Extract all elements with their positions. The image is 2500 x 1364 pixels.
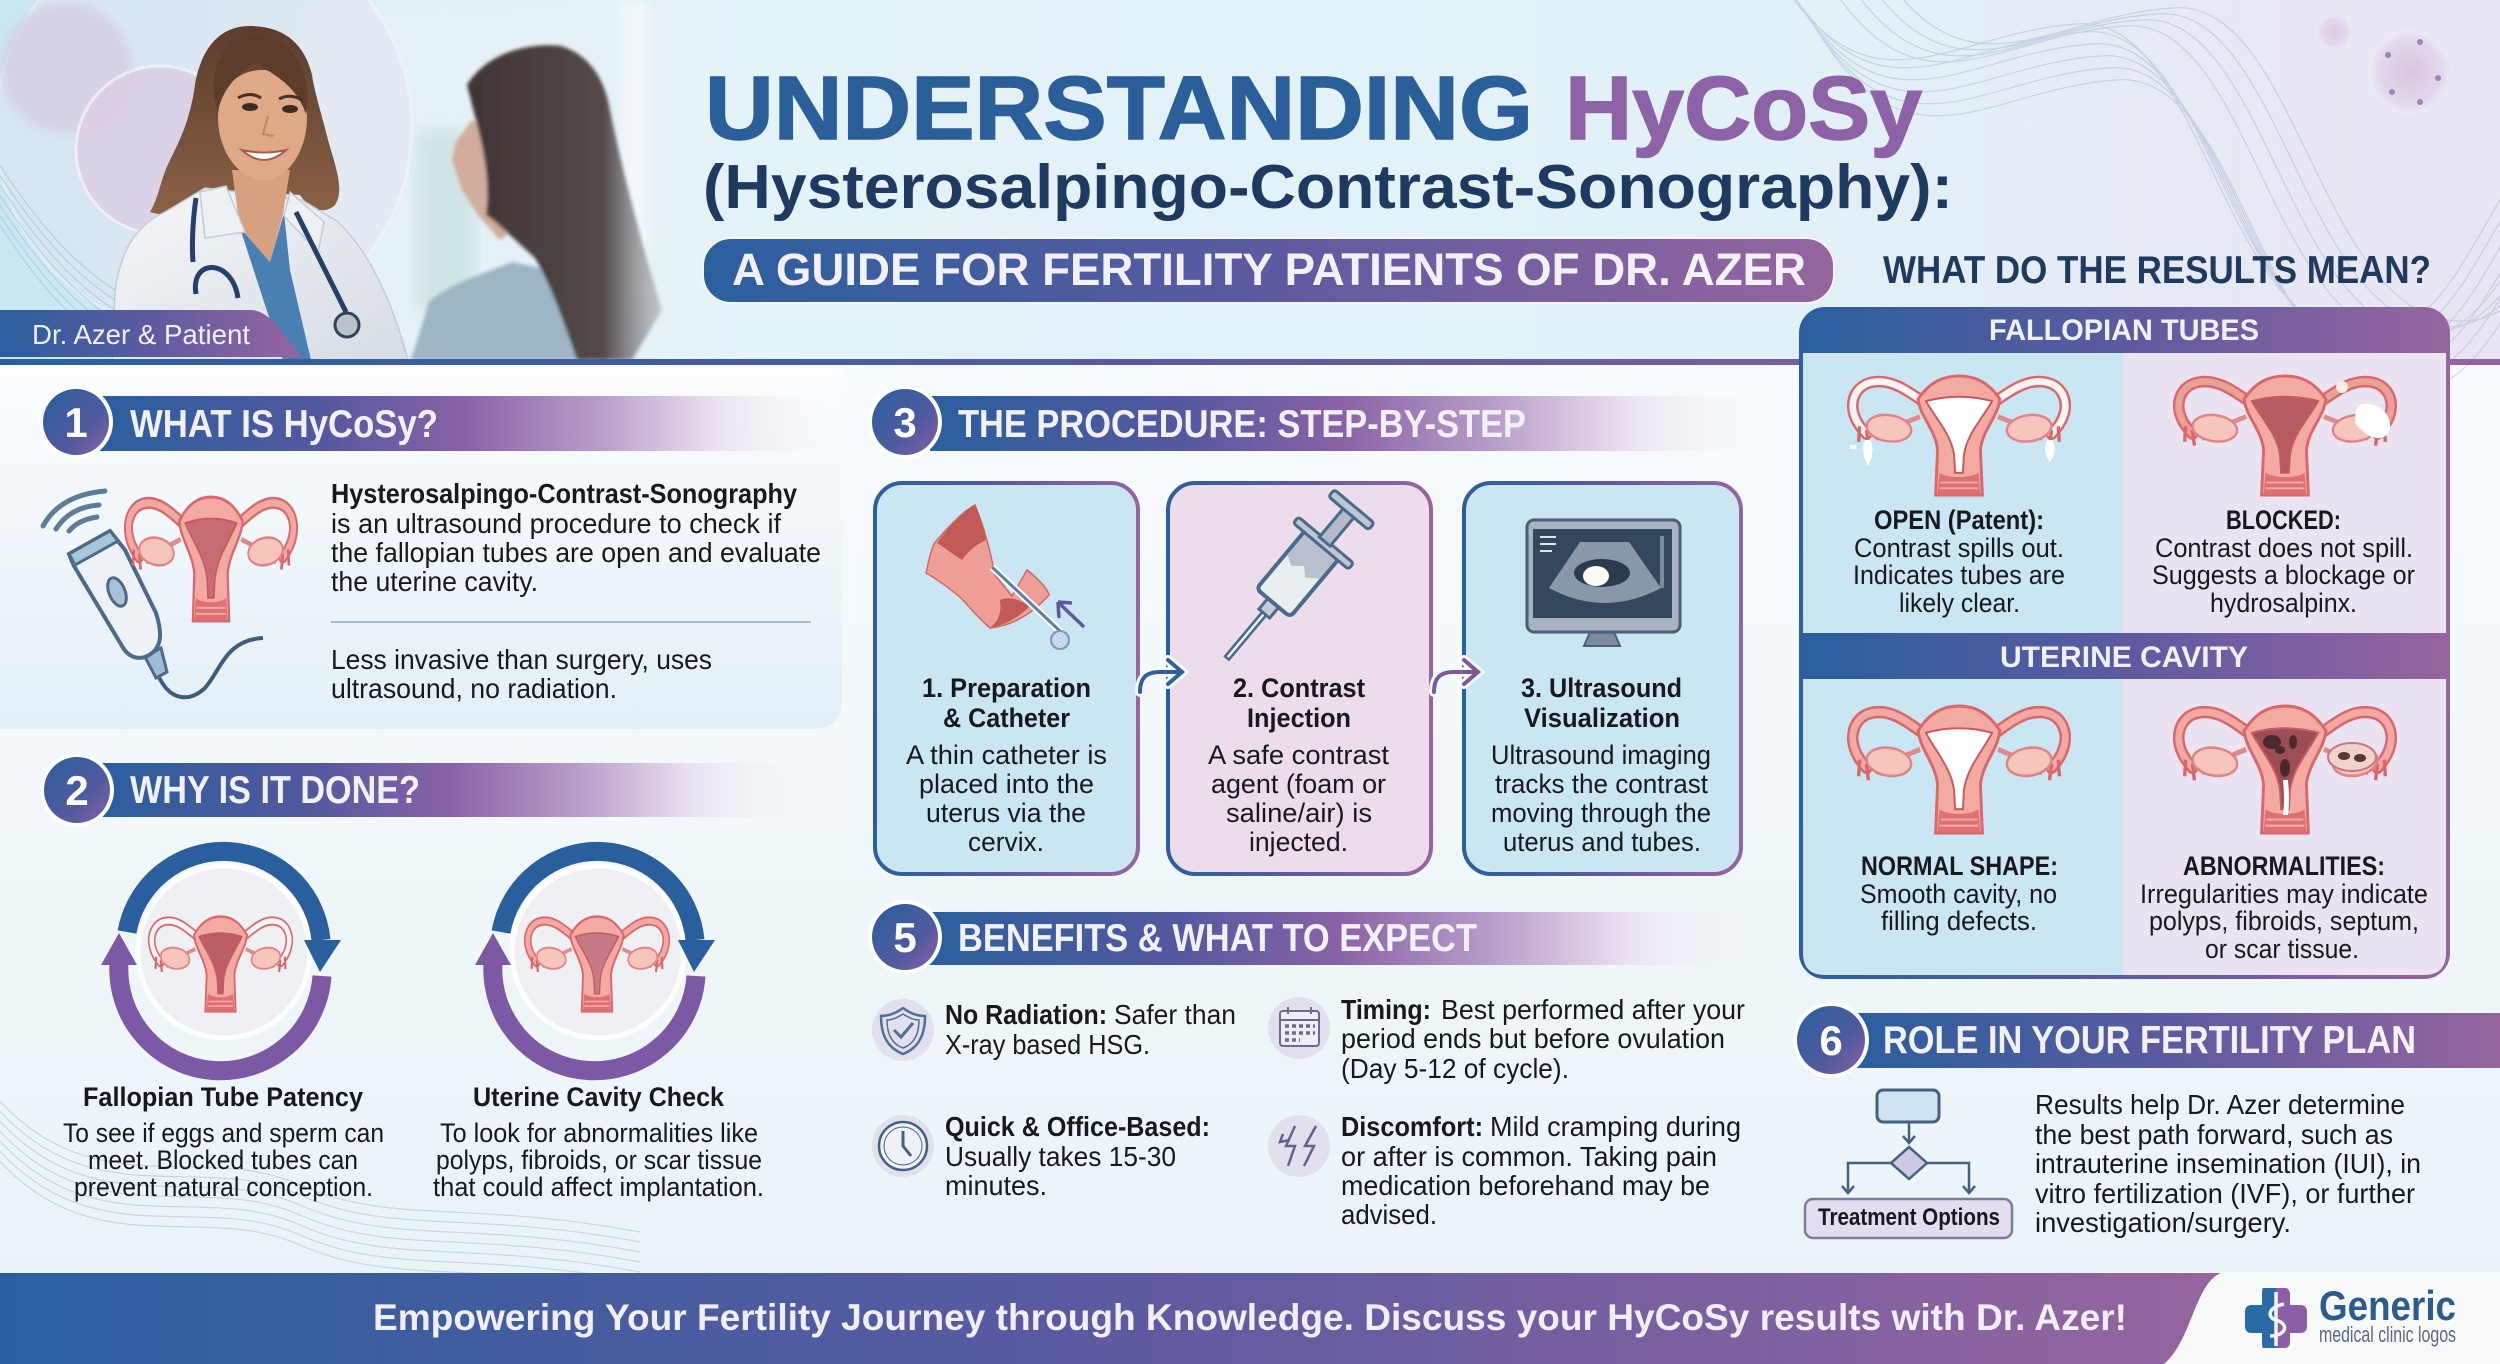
blocked text: Suggests a blockage or xyxy=(2152,560,2415,590)
icon: uterine cavity cycle xyxy=(475,851,715,1071)
title: UNDERSTANDING xyxy=(705,59,1533,159)
benefit: no radiation: No Radiation: xyxy=(945,999,1107,1030)
panel 2: why is it done xyxy=(40,753,800,1202)
abnormalities text: Irregularities may indicate xyxy=(2140,879,2428,909)
section heading 1: WHAT IS HyCoSy? xyxy=(130,403,438,446)
section heading 1 xyxy=(39,385,830,459)
step card 2 xyxy=(1168,483,1431,874)
step 1 text: uterus via the xyxy=(926,798,1086,828)
step 3 text: tracks the contrast xyxy=(1495,769,1708,799)
normal text: NORMAL SHAPE: xyxy=(1861,851,2058,881)
section heading 3 xyxy=(868,385,1755,459)
section heading 2: 2 xyxy=(65,767,89,814)
step 2 text: saline/air) is xyxy=(1226,798,1372,828)
title xyxy=(703,59,1953,222)
section heading 2 xyxy=(40,753,800,827)
benefit: discomfort: medication beforehand may be xyxy=(1341,1170,1710,1201)
benefit note: Less invasive than surgery, uses xyxy=(331,644,712,675)
title: (Hysterosalpingo-Contrast-Sonography): xyxy=(703,153,1953,222)
normal text: Smooth cavity, no xyxy=(1860,879,2057,909)
open text: Contrast spills out. xyxy=(1854,533,2064,563)
step 1 text: cervix. xyxy=(968,827,1044,857)
results header: uterine cavity: UTERINE CAVITY xyxy=(2000,641,2248,674)
open text xyxy=(1853,505,2065,618)
text: fallopian tube patency: To see if eggs and sperm can xyxy=(63,1118,384,1148)
benefit note xyxy=(331,644,712,704)
blocked text xyxy=(2152,505,2415,618)
step 3 text: uterus and tubes. xyxy=(1503,827,1701,857)
section heading 5: BENEFITS & WHAT TO EXPECT xyxy=(958,917,1477,960)
benefit: timing xyxy=(1341,994,1745,1084)
step 2 text: agent (foam or xyxy=(1211,769,1386,799)
panel 3: the procedure xyxy=(868,385,1755,874)
footer xyxy=(0,1272,2500,1364)
results header: uterine cavity xyxy=(1801,633,2448,679)
icon: syringe xyxy=(1199,483,1382,681)
section heading 5 xyxy=(868,900,1755,974)
step 1 text xyxy=(906,673,1107,857)
text: uterine cavity check: that could affect implantation. xyxy=(433,1172,764,1202)
result: blocked xyxy=(2152,376,2415,618)
title: HyCoSy xyxy=(1565,59,1922,159)
patient xyxy=(411,45,662,360)
benefit: no radiation xyxy=(945,999,1236,1060)
abnormalities text: polyps, fibroids, septum, xyxy=(2149,906,2419,936)
translucent cells xyxy=(0,0,412,335)
result: open xyxy=(1850,376,2065,618)
plan paragraph: Results help Dr. Azer determine xyxy=(2035,1089,2405,1120)
logo: Generic xyxy=(2319,1282,2456,1329)
step 2 text: Injection xyxy=(1247,703,1351,733)
abnormalities text: or scar tissue. xyxy=(2205,934,2359,964)
benefit: quick and office based: Usually takes 15-30 xyxy=(945,1141,1176,1172)
icon: fallopian tube cycle xyxy=(101,851,341,1071)
treatment options label: Treatment Options xyxy=(1818,1204,2000,1231)
result: normal shape xyxy=(1853,706,2065,936)
image tag: Dr. Azer & Patient: Dr. Azer & Patient xyxy=(32,319,250,350)
normal text xyxy=(1860,851,2058,936)
step card 3 xyxy=(1464,483,1741,874)
results cell backgrounds xyxy=(1803,353,2446,975)
panel 5: benefits and what to expect xyxy=(868,900,1755,1230)
photo: Dr. Azer and patient xyxy=(0,0,663,359)
result: abnormalities xyxy=(2140,706,2428,964)
benefit: quick and office based xyxy=(945,1111,1210,1201)
benefit: timing: period ends but before ovulation xyxy=(1341,1023,1725,1054)
section heading 6: ROLE IN YOUR FERTILITY PLAN xyxy=(1883,1019,2416,1062)
benefit: discomfort: Discomfort: xyxy=(1341,1111,1483,1142)
open text: Indicates tubes are xyxy=(1853,560,2065,590)
icon: discomfort lightning xyxy=(1268,1115,1330,1177)
open text: OPEN (Patent): xyxy=(1874,505,2044,535)
description: is an ultrasound procedure to check if xyxy=(331,508,781,539)
header rule xyxy=(0,359,2500,365)
heading: what do the results mean: WHAT DO THE RESULTS MEAN? xyxy=(1883,249,2431,292)
icon: cells top right xyxy=(2316,14,2453,115)
blocked text: hydrosalpinx. xyxy=(2210,588,2357,618)
plan paragraph: vitro fertilization (IVF), or further xyxy=(2035,1178,2415,1209)
arrow: step 2 to 3 xyxy=(1434,660,1478,692)
benefit: timing: (Day 5-12 of cycle). xyxy=(1341,1053,1569,1084)
section heading 3: 3 xyxy=(893,399,917,446)
text: fallopian tube patency: meet. Blocked tubes can xyxy=(88,1145,358,1175)
clinic backdrop xyxy=(368,2,614,357)
abnormalities text: ABNORMALITIES: xyxy=(2183,851,2385,881)
step 3 text xyxy=(1491,673,1711,857)
step 3 text: Visualization xyxy=(1524,703,1680,733)
text: fallopian tube patency: Fallopian Tube Patency xyxy=(83,1082,363,1112)
panel 6: role in your fertility plan xyxy=(1793,1002,2500,1238)
image tag: Dr. Azer & Patient xyxy=(0,310,302,357)
benefit: quick and office based: Quick & Office-Based: xyxy=(945,1111,1210,1142)
icon: calendar xyxy=(1268,997,1330,1059)
description: the fallopian tubes are open and evaluate xyxy=(331,537,821,568)
results header: fallopian tubes: FALLOPIAN TUBES xyxy=(1989,314,2259,347)
text: uterine cavity check: To look for abnormalities like xyxy=(440,1118,758,1148)
description: Hysterosalpingo-Contrast-Sonography xyxy=(331,478,797,509)
icon: abnormal uterus xyxy=(2179,706,2391,833)
benefit: discomfort: Mild cramping during xyxy=(1490,1111,1741,1142)
flowchart xyxy=(1805,1090,2012,1238)
treatment options label xyxy=(1805,1199,2012,1238)
icon: normal uterus xyxy=(1853,706,2065,833)
arrow: step 1 to 2 xyxy=(1140,660,1182,692)
panel 4: results xyxy=(1801,309,2448,977)
step 1 text: A thin catheter is xyxy=(906,740,1107,770)
benefit: discomfort xyxy=(1341,1111,1741,1230)
icon: uterus with blocked tube xyxy=(2179,376,2391,495)
section heading 6: 6 xyxy=(1819,1017,1843,1064)
text: fallopian tube patency xyxy=(63,1082,384,1202)
step 1 text: placed into the xyxy=(919,769,1094,799)
results header: fallopian tubes xyxy=(1801,309,2448,353)
header background xyxy=(0,0,2500,362)
icon: uterus xyxy=(128,497,294,621)
benefit: timing: Best performed after your xyxy=(1441,994,1745,1025)
step 2 text: A safe contrast xyxy=(1208,740,1389,770)
text: uterine cavity check xyxy=(433,1082,764,1202)
benefit: timing: Timing: xyxy=(1341,994,1431,1025)
doctor xyxy=(112,26,408,360)
benefit: discomfort: or after is common. Taking pain xyxy=(1341,1141,1717,1172)
icon: ultrasound monitor xyxy=(1527,520,1680,646)
text: fallopian tube patency: prevent natural conception. xyxy=(74,1172,373,1202)
section heading 6 xyxy=(1793,1002,2500,1078)
section heading 2: WHY IS IT DONE? xyxy=(130,769,420,812)
plan paragraph: the best path forward, such as xyxy=(2035,1119,2393,1150)
step card 1 xyxy=(875,483,1138,874)
description xyxy=(331,478,821,597)
step 2 text: 2. Contrast xyxy=(1233,673,1365,703)
benefit: no radiation: X-ray based HSG. xyxy=(945,1029,1150,1060)
blocked text: Contrast does not spill. xyxy=(2155,533,2413,563)
open text: likely clear. xyxy=(1899,588,2020,618)
benefit: discomfort: advised. xyxy=(1341,1199,1437,1230)
benefit note: ultrasound, no radiation. xyxy=(331,673,617,704)
icon: clock xyxy=(872,1115,934,1177)
section heading 3: THE PROCEDURE: STEP-BY-STEP xyxy=(958,403,1526,446)
blocked text: BLOCKED: xyxy=(2226,505,2341,535)
text: uterine cavity check: Uterine Cavity Check xyxy=(473,1082,725,1112)
normal text: filling defects. xyxy=(1881,906,2037,936)
step 2 text: injected. xyxy=(1249,827,1348,857)
step 3 text: moving through the xyxy=(1491,798,1711,828)
description: the uterine cavity. xyxy=(331,566,538,597)
benefit: quick and office based: minutes. xyxy=(945,1170,1047,1201)
icon: catheter placement xyxy=(926,505,1084,649)
step 1 text: 1. Preparation xyxy=(922,673,1091,703)
step 3 text: 3. Ultrasound xyxy=(1521,673,1682,703)
icon: uterus with open tubes xyxy=(1850,376,2065,495)
plan paragraph xyxy=(2035,1089,2421,1238)
footer message: Empowering Your Fertility Journey through Knowledge. Discuss your HyCoSy results with Dr. Azer! xyxy=(373,1297,2127,1338)
step 2 text xyxy=(1208,673,1389,857)
logo xyxy=(2245,1282,2456,1348)
step 3 text: Ultrasound imaging xyxy=(1491,740,1711,770)
abnormalities text xyxy=(2140,851,2428,964)
plan paragraph: investigation/surgery. xyxy=(2035,1207,2291,1238)
section heading 1: 1 xyxy=(64,399,88,446)
benefit: no radiation: Safer than xyxy=(1114,999,1236,1030)
plan paragraph: intrauterine insemination (IUI), in xyxy=(2035,1148,2421,1179)
icon: shield xyxy=(872,999,934,1061)
text: uterine cavity check: polyps, fibroids, or scar tissue xyxy=(436,1145,762,1175)
icon: ultrasound probe xyxy=(43,491,263,697)
panel 1: what is HyCoSy xyxy=(0,365,842,729)
subtitle pill: A GUIDE FOR FERTILITY PATIENTS OF DR. AZER xyxy=(732,244,1806,295)
section heading 5: 5 xyxy=(893,914,917,961)
step 1 text: & Catheter xyxy=(943,703,1070,733)
